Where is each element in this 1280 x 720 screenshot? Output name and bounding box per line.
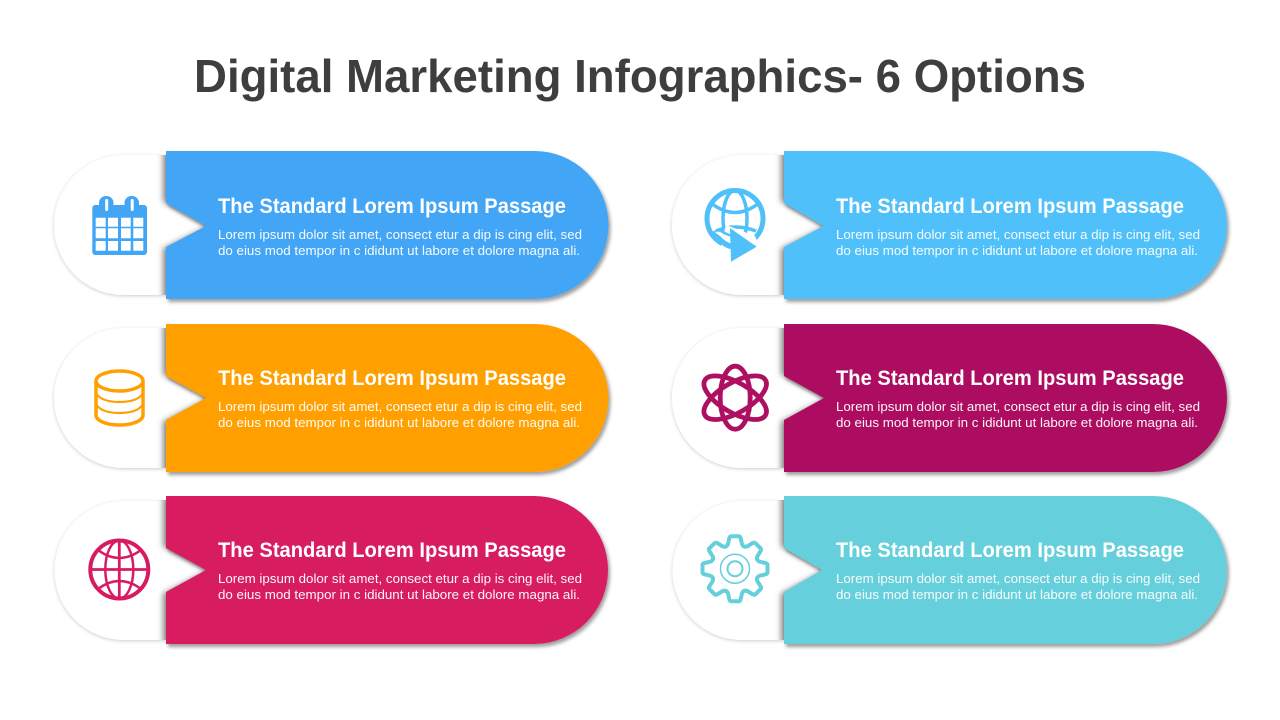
body text: Lorem ipsum dolor sit amet, consect etur a dip is cing elit, sed bbox=[218, 228, 582, 242]
body text: Lorem ipsum dolor sit amet, consect etur a dip is cing elit, sed bbox=[218, 572, 582, 586]
body text: do eius mod tempor in c ididunt ut labore et dolore magna ali. bbox=[218, 244, 580, 258]
heading: The Standard Lorem Ipsum Passage bbox=[218, 194, 566, 218]
body text: do eius mod tempor in c ididunt ut labore et dolore magna ali. bbox=[218, 588, 580, 602]
title: Digital Marketing Infographics- 6 Options bbox=[194, 50, 1086, 102]
panel: option 3 orange bbox=[54, 324, 608, 472]
white icon pill bbox=[672, 328, 785, 468]
heading: The Standard Lorem Ipsum Passage bbox=[836, 194, 1184, 218]
icon: gear bbox=[702, 536, 768, 601]
panel: option 1 blue bbox=[54, 151, 608, 299]
heading: The Standard Lorem Ipsum Passage bbox=[218, 538, 566, 562]
teal banner bbox=[784, 496, 1227, 644]
icon: globe bbox=[90, 540, 148, 598]
white icon pill bbox=[54, 501, 167, 640]
heading: The Standard Lorem Ipsum Passage bbox=[836, 366, 1184, 390]
body text: do eius mod tempor in c ididunt ut labore et dolore magna ali. bbox=[836, 416, 1198, 430]
sky banner bbox=[784, 151, 1227, 299]
body text: Lorem ipsum dolor sit amet, consect etur a dip is cing elit, sed bbox=[218, 400, 582, 414]
white icon pill bbox=[54, 155, 167, 295]
body text: Lorem ipsum dolor sit amet, consect etur a dip is cing elit, sed bbox=[836, 228, 1200, 242]
body text: Lorem ipsum dolor sit amet, consect etur a dip is cing elit, sed bbox=[836, 572, 1200, 586]
body text: do eius mod tempor in c ididunt ut labore et dolore magna ali. bbox=[218, 416, 580, 430]
icon: atom bbox=[697, 366, 773, 429]
white icon pill bbox=[672, 501, 785, 640]
white icon pill bbox=[54, 328, 167, 468]
icon: calendar bbox=[92, 196, 147, 255]
icon: database bbox=[96, 371, 143, 425]
white icon pill bbox=[672, 155, 785, 295]
panel: option 2 sky blue bbox=[672, 151, 1227, 299]
panel: option 5 pink bbox=[54, 496, 608, 644]
body text: do eius mod tempor in c ididunt ut labore et dolore magna ali. bbox=[836, 588, 1198, 602]
heading: The Standard Lorem Ipsum Passage bbox=[218, 366, 566, 390]
orange banner bbox=[166, 324, 608, 472]
blue banner bbox=[166, 151, 608, 299]
body text: do eius mod tempor in c ididunt ut labore et dolore magna ali. bbox=[836, 244, 1198, 258]
icon: globe with arrow bbox=[707, 190, 766, 262]
panel: option 6 teal bbox=[672, 496, 1227, 644]
body text: Lorem ipsum dolor sit amet, consect etur a dip is cing elit, sed bbox=[836, 400, 1200, 414]
panel: option 4 purple bbox=[672, 324, 1227, 472]
pink banner bbox=[166, 496, 608, 644]
heading: The Standard Lorem Ipsum Passage bbox=[836, 538, 1184, 562]
purple banner bbox=[784, 324, 1227, 472]
